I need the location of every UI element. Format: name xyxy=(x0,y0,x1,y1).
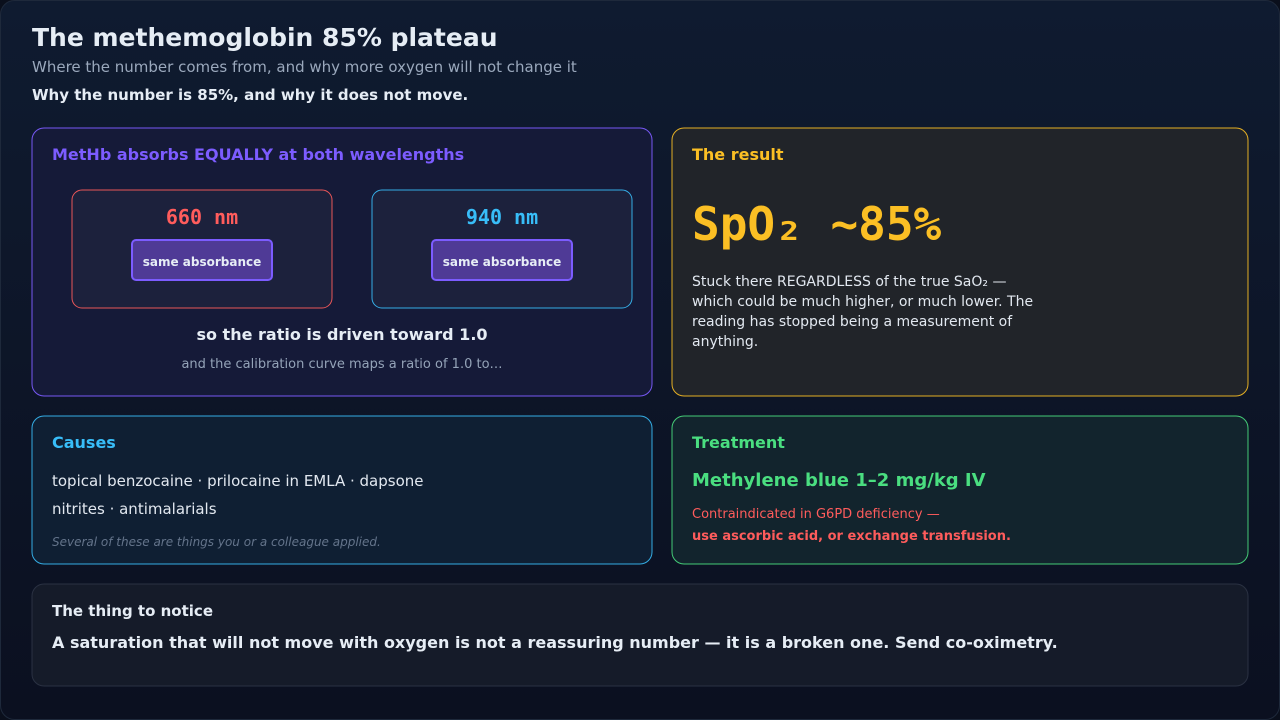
absorbance badge xyxy=(432,240,572,280)
contraindication: Contraindicated in G6PD deficiency — xyxy=(692,507,940,522)
panel: treatment xyxy=(672,416,1248,564)
causes line two: nitrites · antimalarials xyxy=(52,500,217,518)
absorbance badge: same absorbance xyxy=(443,255,561,269)
card: 940 nm xyxy=(372,190,632,308)
panel heading: The thing to notice xyxy=(52,602,213,620)
title: The methemoglobin 85% plateau xyxy=(32,23,498,52)
ratio statement: so the ratio is driven toward 1.0 xyxy=(196,325,488,344)
treatment drug: Methylene blue 1–2 mg/kg IV xyxy=(692,470,986,491)
lead sentence: Why the number is 85%, and why it does not move. xyxy=(32,86,468,104)
result explanation: reading has stopped being a measurement of xyxy=(692,314,1013,330)
absorbance badge: same absorbance xyxy=(143,255,261,269)
result explanation: Stuck there REGARDLESS of the true SaO₂ — xyxy=(692,274,1006,290)
calibration note: and the calibration curve maps a ratio of 1.0 to… xyxy=(181,357,503,372)
panel: causes xyxy=(32,416,652,564)
panel heading: Treatment xyxy=(692,433,785,452)
causes footnote: Several of these are things you or a colleague applied. xyxy=(52,535,381,549)
panel heading: Causes xyxy=(52,433,116,452)
causes line one: topical benzocaine · prilocaine in EMLA · dapsone xyxy=(52,472,423,490)
key message: A saturation that will not move with oxygen is not a reassuring number — it is a broken one. Send co-oximetry. xyxy=(52,633,1058,652)
result explanation: anything. xyxy=(692,334,758,350)
result explanation xyxy=(692,274,1033,350)
result explanation: which could be much higher, or much lower. The xyxy=(692,294,1033,310)
wavelength label: 660 nm xyxy=(166,205,238,229)
panel: MetHb absorption xyxy=(32,128,652,396)
wavelength label: 940 nm xyxy=(466,205,538,229)
SpO2 reading: SpO₂ ~85% xyxy=(692,197,942,251)
subtitle: Where the number comes from, and why more oxygen will not change it xyxy=(32,58,577,76)
card: 660 nm xyxy=(72,190,332,308)
panel heading: The result xyxy=(692,145,784,164)
panel: the thing to notice xyxy=(32,584,1248,686)
panel: the result xyxy=(672,128,1248,396)
absorbance badge xyxy=(132,240,272,280)
alternative treatment: use ascorbic acid, or exchange transfusion. xyxy=(692,529,1011,544)
panel heading: MetHb absorbs EQUALLY at both wavelengths xyxy=(52,145,464,164)
